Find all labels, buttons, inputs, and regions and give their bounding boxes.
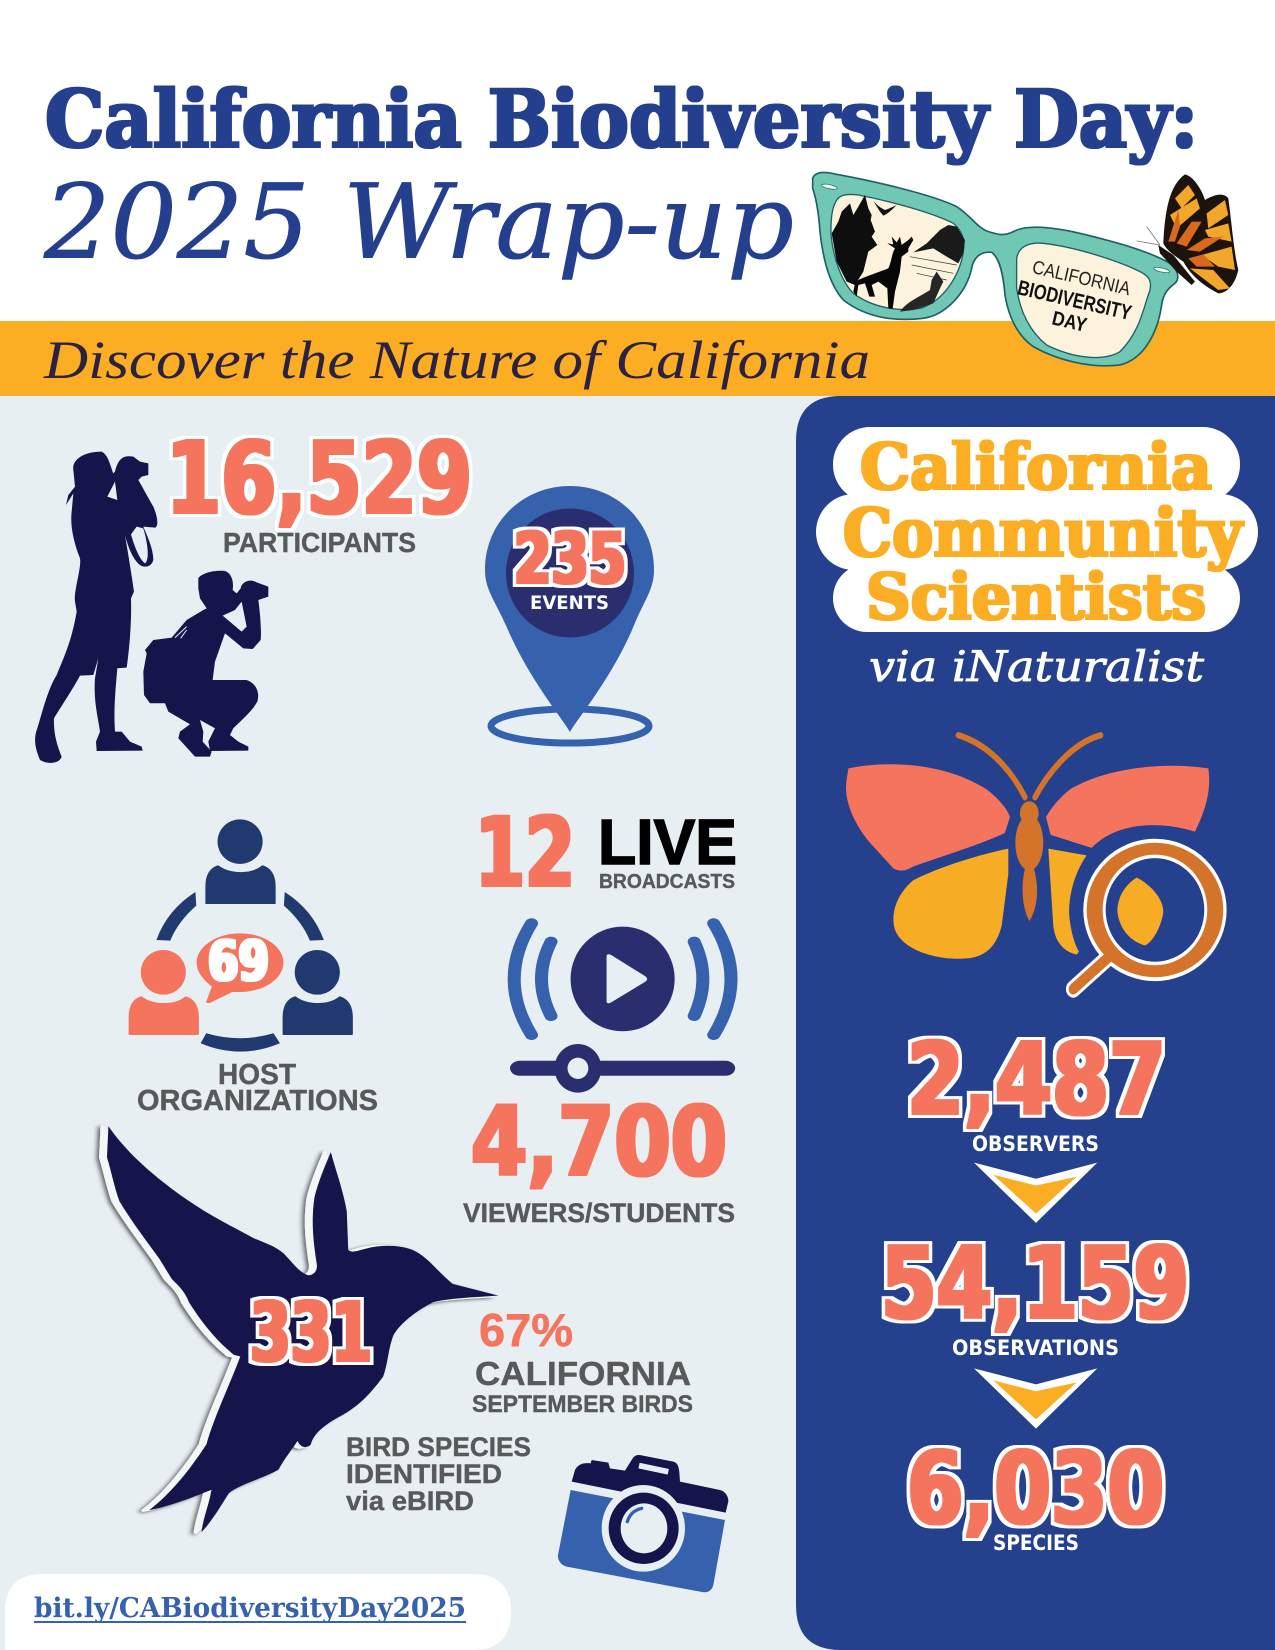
panel heading: Community xyxy=(843,494,1244,572)
stat: species: 6,030 xyxy=(907,1430,1164,1547)
stat: live broadcasts: BROADCASTS xyxy=(599,871,735,893)
stat: live broadcasts: LIVE xyxy=(598,806,737,878)
orange tagline band: Discover the Nature of California xyxy=(43,330,870,390)
stat: observations: 54,159 xyxy=(881,1225,1189,1342)
stat: events: EVENTS xyxy=(530,592,609,614)
icon: play button with slider xyxy=(514,923,731,1093)
link pill: bit.ly/CABiodiversityDay2025 xyxy=(34,1593,466,1624)
stat: species: SPECIES xyxy=(993,1531,1079,1555)
icon: two photographers silhouette xyxy=(35,452,268,763)
panel: California Community Scientists xyxy=(796,396,1275,1650)
icon: map pin with events count xyxy=(485,486,654,743)
orange tagline band xyxy=(0,321,1275,396)
stat: 67 percent of California September birds: SEPTEMBER BIRDS xyxy=(472,1391,693,1418)
label: bird species identified via eBird: BIRD SPECIES xyxy=(346,1432,531,1462)
title xyxy=(43,72,1198,283)
stat: participants: 16,529 xyxy=(166,420,472,537)
stat: observers: OBSERVERS xyxy=(972,1132,1099,1156)
monarch butterfly xyxy=(1137,174,1238,293)
icon: sunglasses with butterfly: CALIFORNIA xyxy=(1030,257,1133,300)
panel heading xyxy=(816,427,1258,635)
label: bird species identified via eBird: via eBIRD xyxy=(346,1486,474,1516)
subheading: via iNaturalist: via iNaturalist xyxy=(869,642,1204,691)
stat: observations: OBSERVATIONS xyxy=(952,1336,1119,1360)
stat: 67 percent of California September birds xyxy=(472,1304,693,1418)
label: bird species identified via eBird: IDENTIFIED xyxy=(346,1459,502,1489)
title: California Biodiversity Day: xyxy=(45,72,1198,166)
stat: live broadcasts xyxy=(475,797,737,909)
panel heading: Scientists xyxy=(866,560,1206,635)
icon: sunglasses with butterfly: DAY xyxy=(1050,307,1089,337)
icon: host organizations network xyxy=(129,819,378,1117)
stat: 67 percent of California September birds: 67% xyxy=(479,1304,573,1356)
label: host organizations: HOST xyxy=(218,1059,296,1091)
stat: live broadcasts: 12 xyxy=(475,797,575,909)
stat: participants: PARTICIPANTS xyxy=(223,527,416,558)
icon: camera xyxy=(558,1455,728,1592)
stat: 67 percent of California September birds: CALIFORNIA xyxy=(475,1355,691,1392)
title: 2025 Wrap-up xyxy=(43,161,794,283)
label: host organizations xyxy=(137,1059,378,1117)
stat: observers: 2,487 xyxy=(907,1021,1166,1138)
stat: viewers and students: VIEWERS/STUDENTS xyxy=(463,1198,735,1228)
panel heading: California xyxy=(860,430,1212,505)
stat: viewers and students xyxy=(463,1086,735,1228)
icon: sunglasses with butterfly: BIODIVERSITY xyxy=(1015,276,1134,325)
arrow: observations to species xyxy=(974,1368,1097,1429)
label: host organizations: ORGANIZATIONS xyxy=(137,1085,378,1117)
stat: events xyxy=(514,518,626,614)
stat: events: 235 xyxy=(514,518,626,600)
label: bird species identified via eBird xyxy=(346,1432,531,1516)
icon: sunglasses with butterfly xyxy=(813,172,1238,366)
icon: hummingbird silhouette with bird count xyxy=(101,1126,498,1532)
arrow: observers to observations xyxy=(974,1163,1097,1223)
icon: host organizations network: 69 xyxy=(208,929,269,993)
stat: viewers and students: 4,700 xyxy=(471,1086,727,1198)
stat: bird species count: 331 xyxy=(250,1286,372,1381)
link pill xyxy=(5,1574,511,1650)
icon: butterfly with magnifying glass xyxy=(846,735,1227,989)
stat: participants xyxy=(166,420,472,558)
